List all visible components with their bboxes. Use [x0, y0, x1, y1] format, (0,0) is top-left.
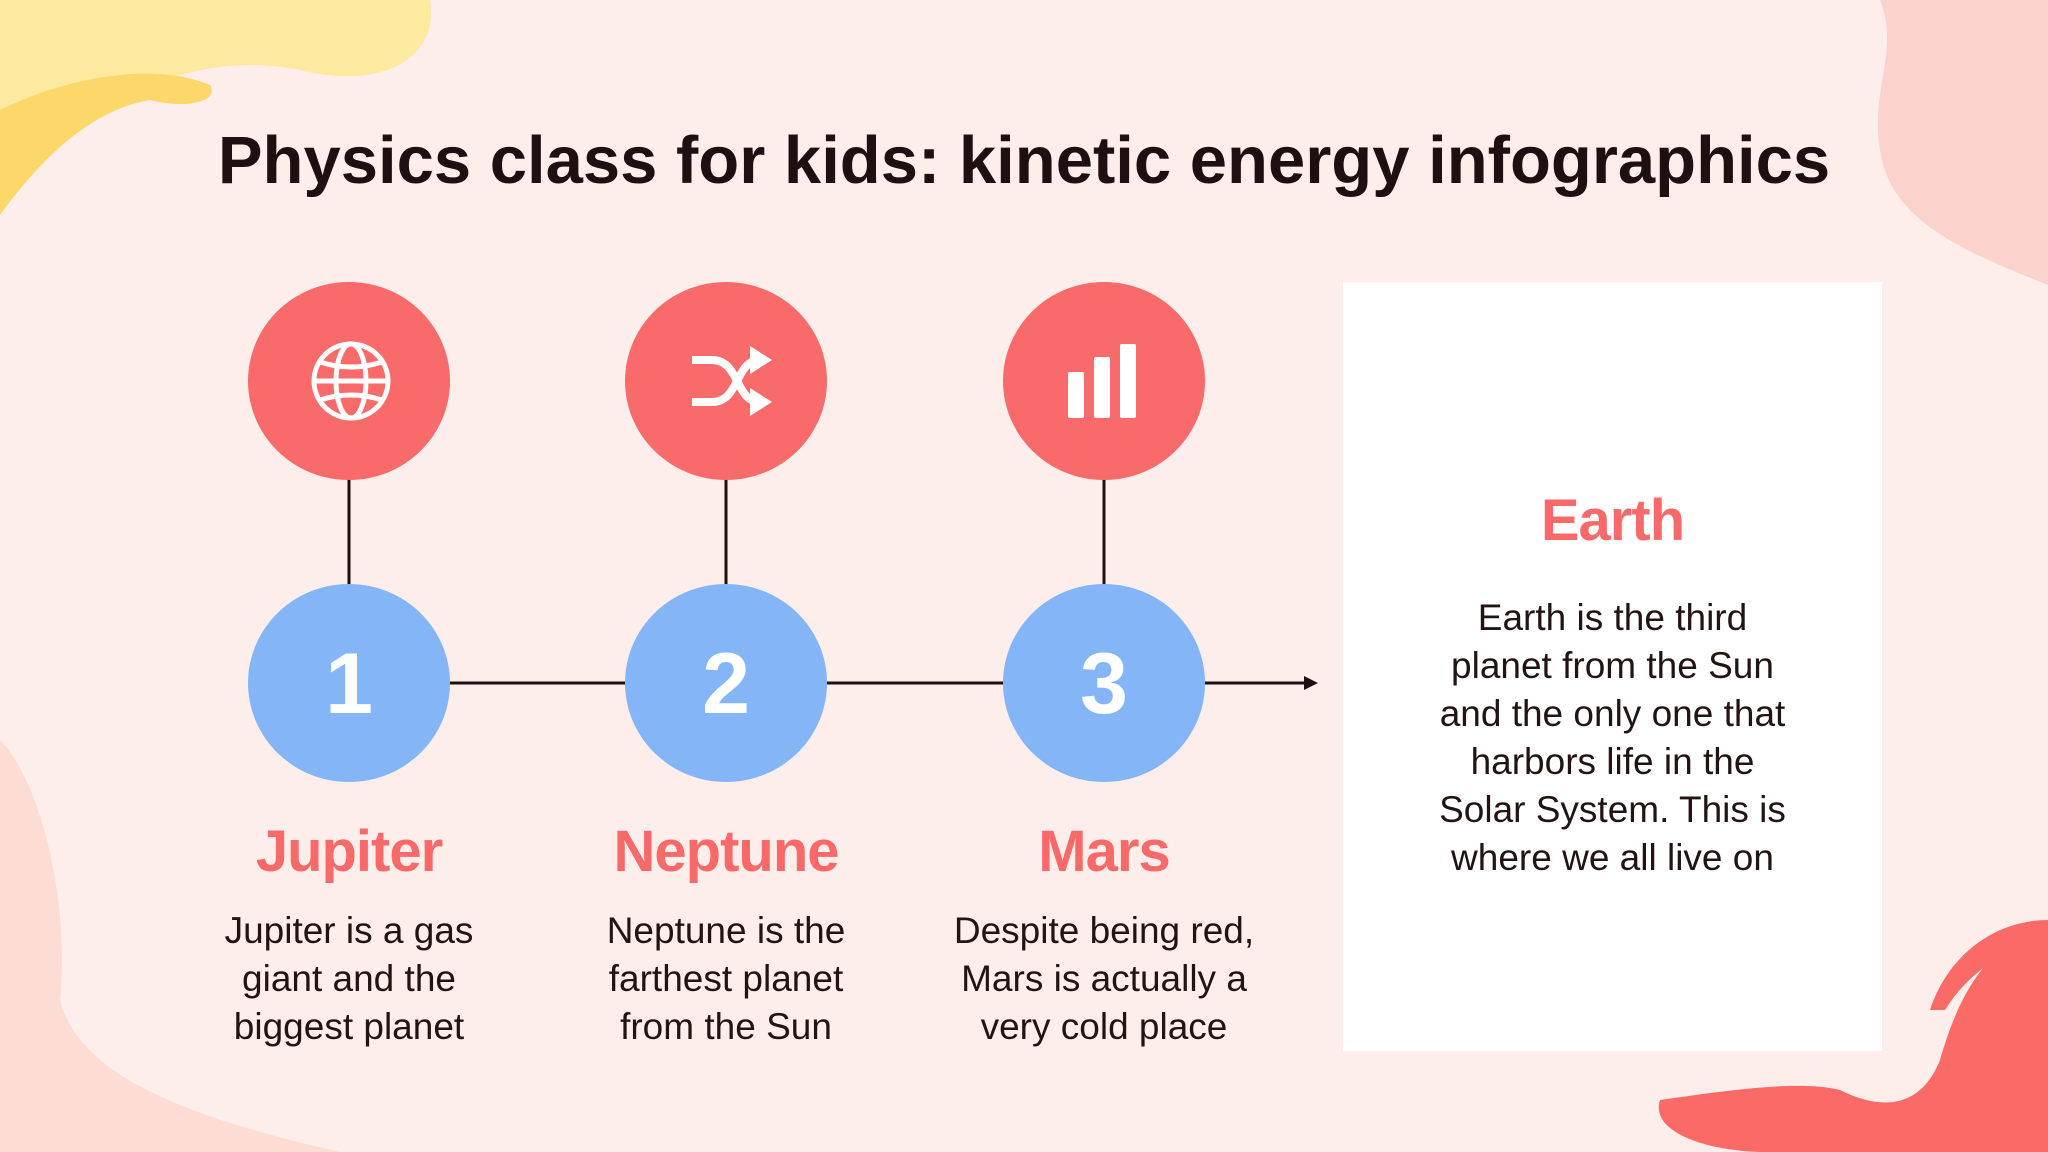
Neptune: Neptune	[614, 819, 838, 884]
numbers: 2	[702, 636, 750, 732]
panel Earth	[1343, 282, 1882, 1051]
Neptune: from the Sun	[620, 1006, 832, 1047]
Mars	[954, 819, 1254, 1047]
Jupiter: biggest planet	[234, 1006, 464, 1047]
Jupiter: giant and the	[242, 958, 456, 999]
Jupiter: Jupiter is a gas	[225, 910, 473, 951]
panel Earth: harbors life in the	[1471, 741, 1754, 782]
Mars: Mars	[1038, 819, 1170, 884]
Neptune: farthest planet	[609, 958, 843, 999]
panel Earth: planet from the Sun	[1451, 645, 1774, 686]
Mars: very cold place	[981, 1006, 1227, 1047]
Jupiter: Jupiter	[256, 819, 442, 884]
Mars: Mars is actually a	[961, 958, 1247, 999]
Neptune: Neptune is the	[607, 910, 845, 951]
numbers	[325, 636, 1128, 732]
icon globe	[314, 344, 388, 418]
title: Physics class for kids: kinetic energy infographics	[218, 123, 1830, 198]
panel Earth: and the only one that	[1440, 693, 1785, 734]
icon shuffle	[692, 360, 760, 402]
icon bars	[1068, 344, 1136, 418]
panel Earth: Earth	[1541, 488, 1684, 553]
panel Earth: Earth is the third	[1478, 597, 1747, 638]
Neptune	[607, 819, 845, 1047]
panel Earth: Solar System. This is	[1439, 789, 1786, 830]
Jupiter	[225, 819, 473, 1047]
panel Earth: where we all live on	[1451, 837, 1774, 878]
numbers: 1	[325, 636, 373, 732]
numbers: 3	[1080, 636, 1128, 732]
Mars: Despite being red,	[954, 910, 1254, 951]
